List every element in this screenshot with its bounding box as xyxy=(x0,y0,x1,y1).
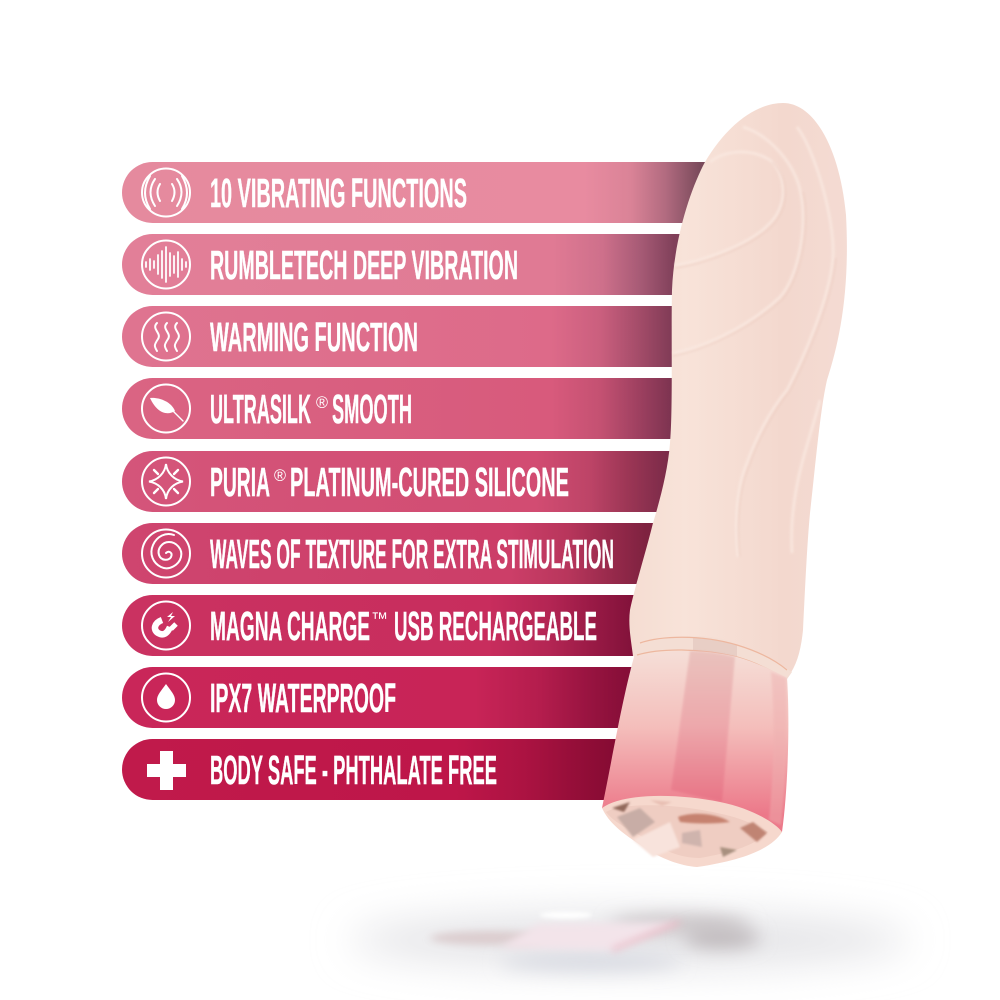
bar: warming xyxy=(122,306,712,367)
bar: magna charge: USB RECHARGEABLE xyxy=(394,603,597,649)
bar: ultrasilk: SMOOTH xyxy=(332,386,412,432)
bar: body safe xyxy=(122,739,712,800)
bar: waterproof xyxy=(122,667,712,728)
icon: heat waves xyxy=(142,312,190,360)
panel: feature list xyxy=(122,162,712,800)
bar: waves of texture xyxy=(122,523,712,584)
floor shadow xyxy=(350,912,910,971)
bar: 10 vibrating functions xyxy=(122,162,712,223)
icon: feather xyxy=(142,384,190,432)
bar: waterproof: IPX7 WATERPROOF xyxy=(210,675,396,721)
bar: puria xyxy=(122,451,712,512)
label: PURIA xyxy=(210,459,270,505)
label: MAGNA CHARGE xyxy=(210,603,370,649)
crystal gem xyxy=(602,796,782,867)
bar: rumbletech: RUMBLETECH DEEP VIBRATION xyxy=(210,242,518,288)
ceramic base xyxy=(602,651,788,858)
icon: spiral xyxy=(142,530,190,578)
label: ™ xyxy=(371,609,388,628)
bar: 10 vibrating functions: 10 VIBRATING FUNCTIONS xyxy=(210,170,467,216)
icon: water drop xyxy=(142,674,190,722)
label: ® xyxy=(274,466,286,485)
icon: sound wave xyxy=(142,240,190,288)
icon: magnet xyxy=(142,602,190,650)
bar: rumbletech xyxy=(122,234,712,295)
icon: sparkle star xyxy=(142,458,190,506)
product illustration xyxy=(602,103,847,867)
label: ULTRASILK xyxy=(210,386,311,432)
label: ® xyxy=(316,393,328,412)
bar: puria: PLATINUM-CURED SILICONE xyxy=(290,459,569,505)
bar: body safe: BODY SAFE - PHTHALATE FREE xyxy=(210,747,497,793)
label xyxy=(210,459,569,505)
icon: vibration xyxy=(142,168,190,216)
icon: plus xyxy=(147,751,186,790)
collar ring xyxy=(633,636,792,682)
bar: ultrasilk xyxy=(122,378,712,439)
product body xyxy=(629,103,847,677)
bar: warming: WARMING FUNCTION xyxy=(210,314,418,360)
bar: magna charge xyxy=(122,595,712,656)
